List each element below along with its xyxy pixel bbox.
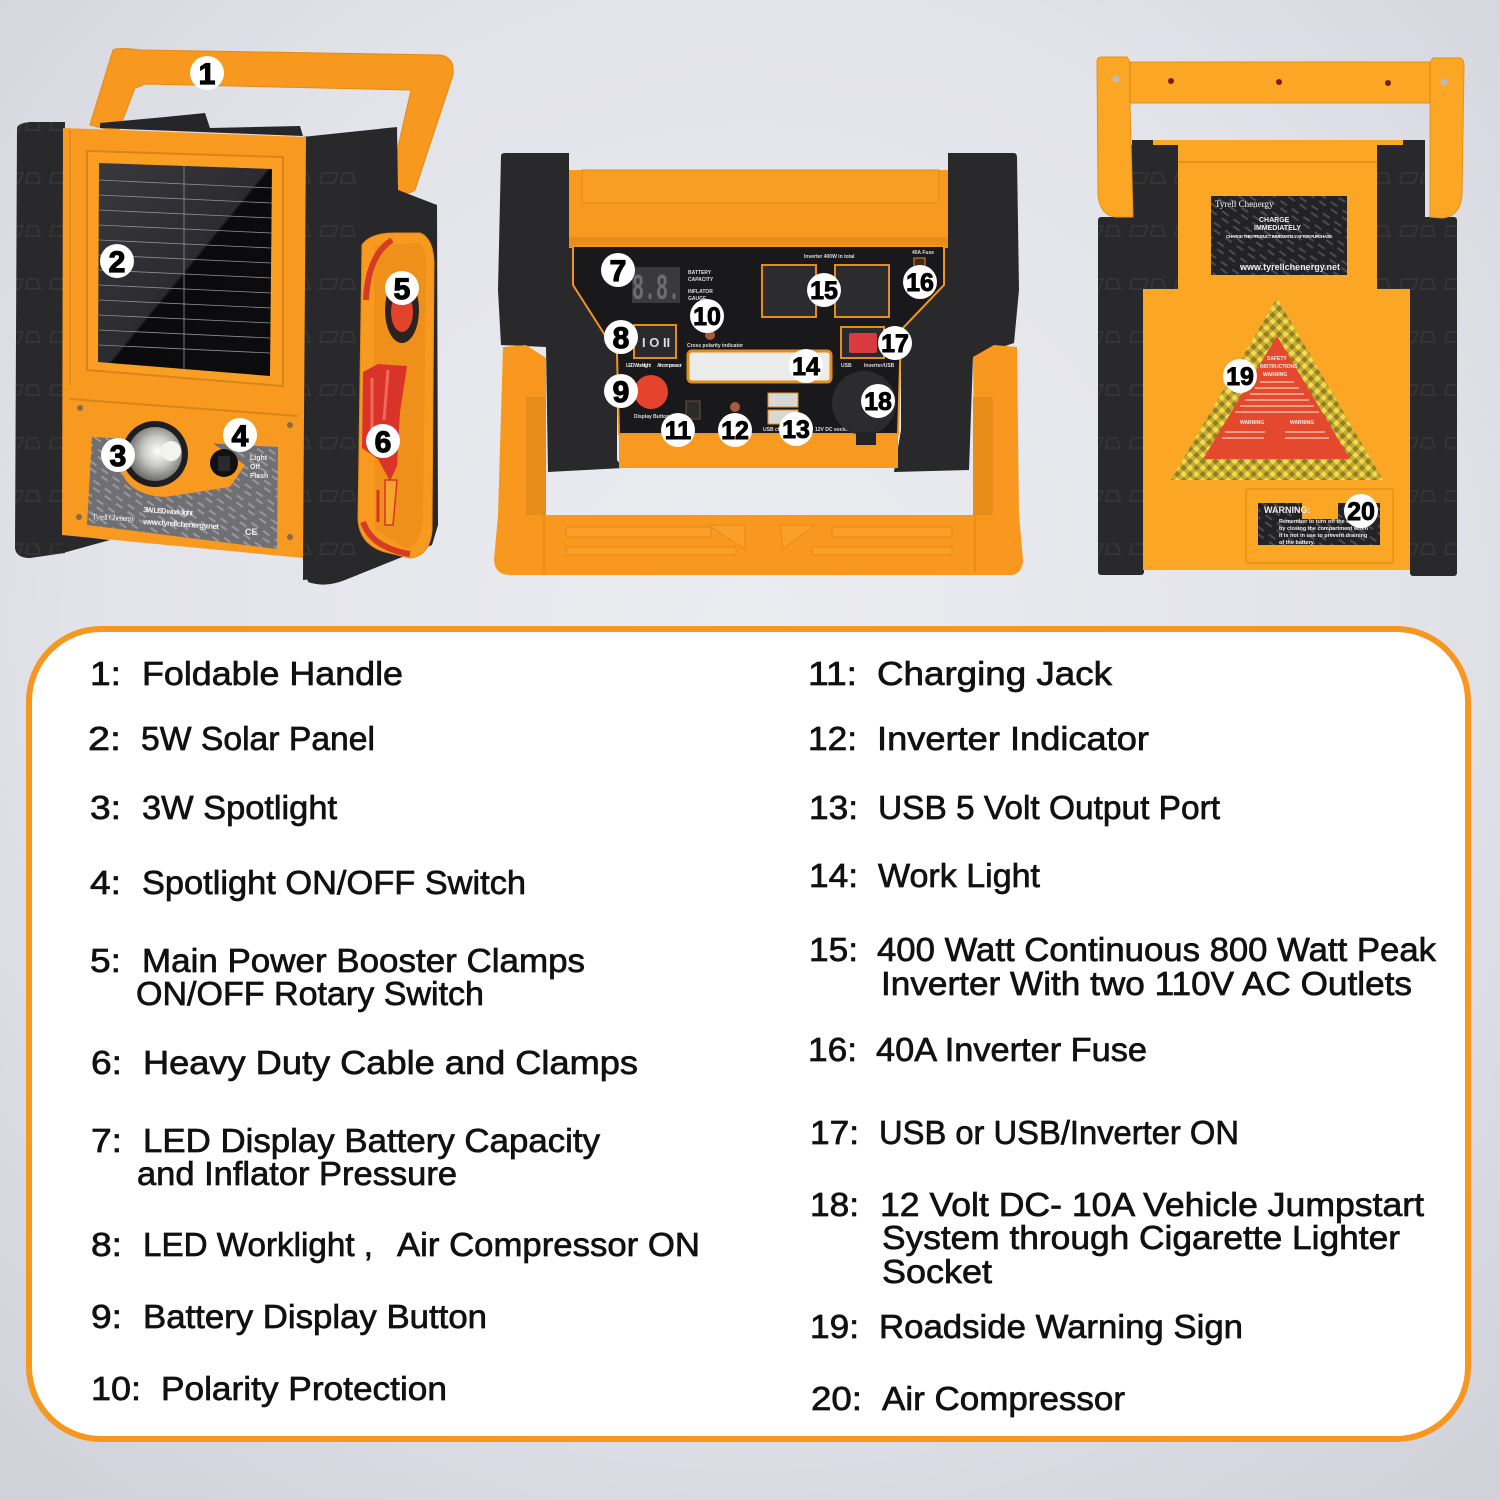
- callout 9: 9: [613, 376, 629, 409]
- item 5: Main Power Booster Clamps: [142, 942, 585, 979]
- warning triangle: INSTRUCTIONS: [1260, 364, 1298, 370]
- air compressor door: [1246, 489, 1393, 563]
- callout 16: [903, 265, 937, 299]
- air compressor door: it is not in use to prevent draining: [1279, 533, 1367, 539]
- rubber front bumper: [303, 132, 360, 580]
- number callouts: [100, 56, 1378, 528]
- black side housing: [302, 127, 438, 585]
- control panel face: [573, 246, 944, 445]
- callout 1: [190, 56, 224, 91]
- metal label plate: CE: [245, 527, 258, 537]
- callout 3: 3: [110, 440, 126, 473]
- charge warning label: CHARGE: [1259, 217, 1290, 224]
- item 18: System through Cigarette Lighter: [882, 1219, 1400, 1256]
- callout 15: [807, 273, 841, 307]
- callout 10: [690, 299, 724, 333]
- worklight switch: Air compressor: [657, 363, 682, 369]
- item 15: 400 Watt Continuous 800 Watt Peak: [877, 931, 1437, 968]
- product: control panel view: [494, 153, 1023, 575]
- item 6: Heavy Duty Cable and Clamps: [143, 1044, 638, 1081]
- charge warning label: Tyrell Chenergy: [1215, 199, 1274, 209]
- display button: [634, 375, 669, 420]
- callout 14: [789, 349, 823, 383]
- legend panel: [29, 629, 1468, 1439]
- item 2: 5W Solar Panel: [141, 720, 375, 757]
- callout 3: [101, 438, 135, 473]
- top strap and cap: [100, 113, 303, 136]
- metal label plate: Flash: [250, 473, 268, 480]
- worklight switch: LED Worklight: [626, 363, 651, 369]
- item 19: 19:: [810, 1308, 859, 1345]
- LED display: INFLATOR: [688, 289, 713, 295]
- LED display: BATTERY: [688, 270, 712, 276]
- air compressor door: Remember to turn off the light: [1279, 519, 1358, 525]
- black rubber right: [1410, 217, 1457, 576]
- callout 4: 4: [232, 420, 249, 453]
- callout 13: 13: [782, 416, 810, 444]
- orange spotlight bezel: [118, 410, 245, 497]
- item 1: Foldable Handle: [142, 655, 403, 692]
- USB ports: [763, 393, 850, 433]
- item 14: [809, 857, 1040, 894]
- item 7: LED Display Battery Capacity: [143, 1122, 601, 1159]
- fuse: 40A Fuse: [912, 250, 934, 256]
- callout 18: [861, 384, 895, 418]
- U handle: [494, 345, 1023, 575]
- item 16: 16:: [808, 1031, 857, 1068]
- callout 5: [385, 271, 419, 306]
- metal label plate: [87, 437, 278, 549]
- warning triangle: [1171, 298, 1383, 480]
- item 13: 13:: [809, 789, 858, 826]
- black rubber left: [1098, 217, 1144, 575]
- item 10: 10:: [91, 1370, 141, 1407]
- metal label plate: Light: [250, 455, 268, 462]
- callout 12: [718, 413, 752, 447]
- warning triangle: WARNING: [1290, 420, 1314, 426]
- item 15: 15:: [809, 931, 858, 968]
- product: back view: [1097, 57, 1464, 576]
- item 20: Air Compressor: [882, 1380, 1125, 1417]
- item 7: and Inflator Pressure: [137, 1155, 457, 1192]
- warning triangle: WARNING: [1240, 420, 1264, 426]
- callout 5: 5: [394, 273, 410, 306]
- legend left column: [88, 655, 700, 1407]
- callout 11: 11: [665, 417, 691, 445]
- orange bottom strip: [619, 430, 898, 468]
- air compressor door: WARNING:: [1264, 505, 1310, 515]
- handle grip markings: [566, 525, 952, 555]
- orange top section: [569, 170, 948, 248]
- item 17: USB or USB/Inverter ON: [879, 1114, 1239, 1151]
- callout 8: 8: [613, 322, 629, 355]
- item 16: 40A Inverter Fuse: [876, 1031, 1147, 1068]
- item 8: Air Compressor ON: [397, 1226, 700, 1263]
- black housing left: [498, 153, 623, 472]
- item 19: Roadside Warning Sign: [879, 1308, 1243, 1345]
- charge warning label: [1211, 196, 1347, 275]
- callout 10: 10: [693, 303, 721, 331]
- item 11: [808, 655, 1113, 692]
- inverter switch: USB: [841, 363, 852, 369]
- callout 20: [1344, 494, 1378, 528]
- metal label plate: Off: [250, 464, 261, 471]
- item 12: 12:: [808, 720, 857, 757]
- item 17: 17:: [810, 1114, 859, 1151]
- handle arm recesses: [526, 397, 993, 515]
- item 6: 6:: [91, 1044, 122, 1081]
- red clamp: [362, 364, 407, 525]
- item 15: [809, 931, 1437, 1002]
- callout 1: 1: [199, 58, 215, 91]
- black housing right: [894, 153, 1019, 472]
- screws: [76, 405, 293, 540]
- legend right column: [808, 655, 1437, 1417]
- item 14: 14:: [809, 857, 858, 894]
- fuse: [912, 250, 934, 268]
- USB ports: USB charging: [763, 427, 796, 433]
- callout 2: [100, 244, 134, 279]
- item 4: 4:: [90, 864, 121, 901]
- callout 8: [604, 320, 638, 355]
- orange body: [1143, 140, 1410, 570]
- black upper shoulder: [1132, 140, 1425, 290]
- callout 19: 19: [1226, 363, 1254, 391]
- charge warning label: www.tyrellchenergy.net: [1239, 262, 1340, 272]
- item 15: Inverter With two 110V AC Outlets: [881, 965, 1412, 1002]
- callout 12: 12: [721, 417, 749, 445]
- inverter switch: Inverter/USB: [864, 363, 895, 369]
- AC outlets: Inverter 400W in total: [804, 254, 855, 260]
- item 8: [91, 1226, 700, 1263]
- item 4: Spotlight ON/OFF Switch: [142, 864, 526, 901]
- foldable handle: [90, 48, 453, 193]
- LED display: CAPACITY: [688, 277, 714, 283]
- callout 11: [661, 413, 695, 447]
- spotlight switch: [210, 449, 238, 477]
- item 9: Battery Display Button: [143, 1298, 487, 1335]
- callout 19: [1223, 359, 1257, 393]
- metal label plate: www.tyrellchenergy.net: [142, 517, 220, 531]
- warning triangle: WARNING: [1263, 372, 1287, 378]
- item 1: 1:: [90, 655, 121, 692]
- item 7: 7:: [91, 1122, 122, 1159]
- callout 16: 16: [906, 269, 934, 297]
- item 9: 9:: [91, 1298, 122, 1335]
- polarity indicator: [687, 330, 743, 349]
- worklight switch: I O II: [642, 335, 670, 350]
- solar panel: [87, 151, 283, 386]
- callout 14: 14: [792, 353, 820, 381]
- callout 2: 2: [109, 246, 125, 279]
- callout 4: [223, 418, 257, 453]
- item 11: 11:: [808, 655, 857, 692]
- AC outlets: [762, 254, 889, 317]
- item 14: Work Light: [878, 857, 1040, 894]
- charge warning label: IMMEDIATELY: [1254, 225, 1301, 232]
- charging jack: [686, 401, 700, 419]
- item 2: 2:: [88, 720, 121, 757]
- callout 18: 18: [864, 388, 892, 416]
- rotary switch: [385, 277, 419, 343]
- callout 9: [604, 374, 638, 409]
- charge warning label: CHARGE THIS PRODUCT IMMEDIATELY AFTER PURCHASE: [1226, 234, 1332, 239]
- inverter switch: [841, 327, 895, 369]
- product: front and side view: [15, 48, 453, 585]
- callout 13: [779, 412, 813, 446]
- item 10: Polarity Protection: [161, 1370, 447, 1407]
- item 12: Inverter Indicator: [877, 720, 1149, 757]
- polarity indicator: Cross polarity indicator: [687, 343, 743, 349]
- item 18: Socket: [882, 1253, 992, 1290]
- item 8: 8:: [91, 1226, 122, 1263]
- worklight switch: [626, 325, 682, 369]
- air compressor door: by closing the compartment when: [1279, 526, 1369, 532]
- work light: [688, 351, 831, 382]
- orange front face: [62, 128, 306, 558]
- callout 7: 7: [610, 255, 626, 288]
- metal label plate: 3W LED work light: [143, 505, 194, 518]
- callout 6: 6: [375, 426, 391, 459]
- warning triangle: SAFETY: [1267, 356, 1287, 362]
- item 11: Charging Jack: [877, 655, 1113, 692]
- item 3: 3W Spotlight: [142, 789, 337, 826]
- item 18: 12 Volt DC- 10A Vehicle Jumpstart: [880, 1186, 1424, 1223]
- LED display: 8.8.: [632, 269, 680, 310]
- item 13: USB 5 Volt Output Port: [878, 789, 1220, 826]
- metal label plate: Tyrell Chenergy: [92, 512, 135, 523]
- item 20: 20:: [811, 1380, 862, 1417]
- display button: Display Button: [634, 414, 669, 420]
- callout 6: [366, 424, 400, 459]
- inverter indicator: [730, 402, 740, 412]
- callout 15: 15: [810, 277, 838, 305]
- black base wedge: [60, 534, 110, 553]
- spotlight: [122, 421, 188, 487]
- callout 7: [601, 253, 635, 288]
- item 5: ON/OFF Rotary Switch: [136, 975, 484, 1012]
- item 7: [91, 1122, 601, 1192]
- 12V socket: [832, 371, 896, 445]
- item 3: 3:: [90, 789, 121, 826]
- USB ports: 12V DC socket: [815, 427, 850, 433]
- air compressor door: of the battery.: [1279, 540, 1315, 546]
- item 8: LED Worklight ,: [143, 1226, 373, 1263]
- callout 17: [878, 326, 912, 360]
- side bay: [358, 233, 434, 558]
- callout 20: 20: [1347, 498, 1375, 526]
- callout 17: 17: [881, 330, 909, 358]
- folded handle: [1097, 57, 1464, 218]
- black rubber left: [15, 122, 65, 558]
- item 5: [90, 942, 585, 1012]
- item 5: 5:: [90, 942, 121, 979]
- item 18: 18:: [810, 1186, 859, 1223]
- LED display: GAUGE: [688, 296, 707, 302]
- item 18: [810, 1186, 1424, 1290]
